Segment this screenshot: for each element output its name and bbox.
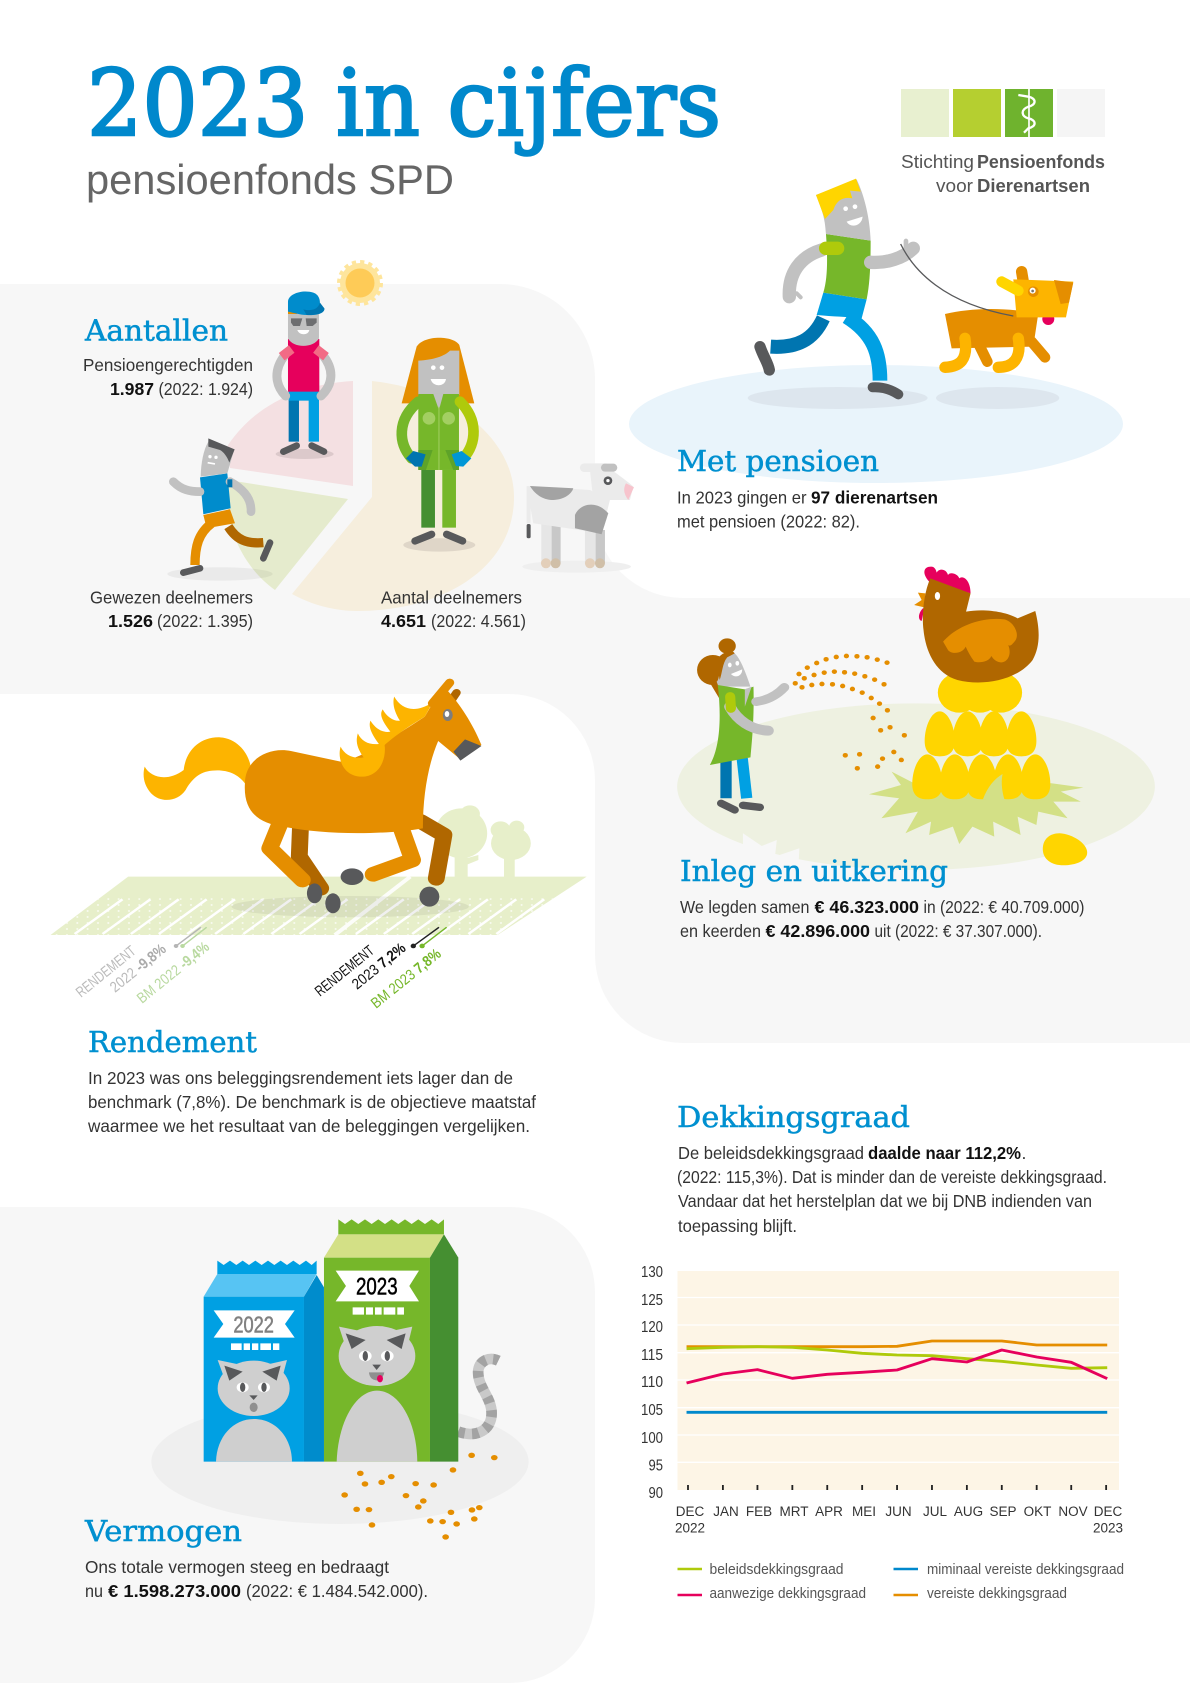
sub-icon: green box 2023: [324, 1219, 458, 1462]
icon: staff and snake: [1018, 89, 1035, 137]
panel: vermogen background: [0, 1207, 595, 1683]
x axis labels: [675, 1504, 1123, 1536]
text: dekkingsgraad: daalde naar 112,2%: [868, 1143, 1021, 1163]
sub-icon: loose egg: [1043, 833, 1087, 865]
icon: sun: [340, 263, 380, 303]
text: gewezen deelnemers: 1.526: [108, 611, 153, 631]
x axis labels: AUG: [954, 1504, 983, 1519]
y axis labels: 115: [641, 1347, 663, 1364]
text: inleg en uitkering: uit (2022: € 37.307.000).: [874, 921, 1042, 941]
logo: voor: [936, 175, 973, 196]
sub-icon: trees: [435, 805, 531, 877]
sub-icon: green box 2023: 2023: [356, 1273, 398, 1300]
labels: rendement 2022: RENDEMENT: [73, 943, 139, 1001]
legend: beleidsdekkingsgraad: [710, 1562, 844, 1578]
x axis labels: 2023: [1093, 1520, 1123, 1536]
sub-icon: blue box 2022: 2022: [233, 1311, 274, 1337]
subtitle: pensioenfonds SPD: [86, 156, 454, 203]
text: dekkingsgraad: .: [1022, 1143, 1026, 1163]
text: gewezen deelnemers: Gewezen deelnemers: [90, 588, 253, 608]
x axis labels: OKT: [1024, 1504, 1051, 1519]
text: met pensioen: [677, 488, 938, 532]
x axis labels: MEI: [852, 1504, 876, 1519]
logo: [901, 89, 1105, 196]
text: inleg en uitkering: in (2022: € 40.709.000): [924, 897, 1084, 917]
sub-icon: field: [51, 877, 587, 935]
y axis labels: 125: [641, 1292, 663, 1309]
text: pensioengerechtigden: (2022: 1.924): [158, 379, 253, 399]
labels: rendement 2022: BM 2022 -9,4%: [134, 939, 213, 1007]
text: met pensioen: In 2023 gingen er: [677, 488, 807, 508]
y axis labels: 105: [641, 1402, 663, 1419]
legend: aanwezige dekkingsgraad: [710, 1586, 866, 1602]
sub-icon: horse: [144, 683, 481, 913]
illustration: horse on field: [51, 683, 587, 948]
logo: Dierenartsen: [977, 175, 1090, 196]
y axis labels: 110: [641, 1374, 663, 1391]
sub-icon: 2022 return marks: [174, 927, 207, 948]
legend: miminaal vereiste dekkingsgraad: [927, 1562, 1124, 1578]
icon: running former participant: [167, 438, 273, 581]
text: gewezen deelnemers: [90, 588, 253, 631]
text: vermogen: Ons totale vermogen steeg en bedraagt: [85, 1557, 389, 1577]
text: gewezen deelnemers: (2022: 1.395): [157, 611, 253, 631]
heading: Inleg en uitkering: Inleg en uitkering: [680, 854, 948, 888]
logo: Stichting: [901, 151, 974, 172]
text: dekkingsgraad: De beleidsdekkingsgraad: [678, 1143, 864, 1163]
text: aantal deelnemers: (2022: 4.561): [431, 611, 526, 631]
sub-icon: cat tail: [458, 1359, 498, 1434]
text: dekkingsgraad: toepassing blijft.: [678, 1216, 797, 1236]
text: inleg en uitkering: [680, 897, 1084, 941]
x axis labels: APR: [815, 1504, 843, 1519]
pie chart: aantallen: [227, 381, 514, 611]
logo: Pensioenfonds: [977, 151, 1105, 172]
icon: calf: [522, 467, 634, 573]
y axis labels: 130: [641, 1264, 663, 1281]
icon: vet woman: [402, 338, 475, 552]
text: vermogen: € 1.598.273.000: [108, 1581, 241, 1601]
data lines and ticks: [687, 1341, 1107, 1490]
illustration: woman feeding hen on eggs: [677, 567, 1155, 883]
heading: Vermogen: Vermogen: [84, 1514, 242, 1548]
labels: rendement 2022: 2022 -9,8%: [107, 941, 170, 996]
text: pensioengerechtigden: Pensioengerechtigden: [83, 355, 253, 375]
icon: man walking dog: [748, 179, 1073, 409]
sub-icon: hen: [914, 567, 1039, 682]
text: aantal deelnemers: [381, 588, 526, 631]
sub-icon: nest: [869, 772, 1083, 844]
text: vermogen: nu: [85, 1581, 103, 1601]
y axis labels: 90: [648, 1485, 663, 1502]
sub-icon: dog: [945, 272, 1073, 367]
x axis labels: 2022: [675, 1520, 705, 1536]
text: aantal deelnemers: Aantal deelnemers: [381, 588, 522, 608]
legend: vereiste dekkingsgraad: [927, 1586, 1067, 1602]
y axis labels: 100: [641, 1430, 663, 1447]
sub-icon: blue box 2022: [204, 1261, 324, 1462]
x axis labels: DEC: [676, 1504, 704, 1519]
icon: pensioner man with cap: [276, 291, 334, 459]
heading: Dekkingsgraad: Dekkingsgraad: [677, 1100, 910, 1134]
sub-icon: 2023 return marks: [411, 927, 447, 948]
text: rendement: In 2023 was ons beleggingsrendement iets lager dan de: [88, 1068, 513, 1088]
text: pensioengerechtigden: 1.987: [110, 379, 154, 399]
text: pensioengerechtigden: [83, 355, 253, 399]
illustration: cat food boxes: [151, 1219, 529, 1540]
text: rendement: waarmee we het resultaat van de beleggingen vergelijken.: [87, 1116, 530, 1136]
legend: [678, 1562, 1124, 1602]
y axis labels: 95: [648, 1458, 663, 1474]
text: rendement: [87, 1068, 536, 1136]
text: inleg en uitkering: We legden samen: [680, 897, 810, 917]
x axis labels: JUL: [923, 1504, 947, 1519]
x axis labels: JUN: [885, 1504, 912, 1519]
sub-icon: eggs: [912, 673, 1050, 799]
y axis labels: 120: [641, 1319, 663, 1336]
labels: rendement 2023: 2023 7,2%: [349, 940, 409, 993]
text: aantal deelnemers: 4.651: [381, 611, 426, 631]
y axis labels: [641, 1264, 663, 1502]
x axis labels: DEC: [1094, 1504, 1122, 1519]
x axis labels: JAN: [713, 1504, 739, 1519]
text: dekkingsgraad: (2022: 115,3%). Dat is minder dan de vereiste dekkingsgraad.: [677, 1167, 1107, 1187]
x axis labels: FEB: [746, 1504, 772, 1519]
heading: Aantallen: Aantallen: [84, 314, 228, 348]
labels: rendement 2023: BM 2023 7,8%: [368, 945, 445, 1012]
sub-icon: scattered seed: [793, 654, 907, 771]
heading: Rendement: Rendement: [88, 1025, 257, 1059]
x axis labels: SEP: [989, 1504, 1017, 1519]
text: met pensioen: met pensioen (2022: 82).: [677, 512, 860, 532]
text: vermogen: (2022: € 1.484.542.000).: [246, 1581, 428, 1601]
ground: met pensioen: [629, 365, 1123, 483]
title: 2023 in cijfers: [87, 50, 721, 157]
heading: Met pensioen: Met pensioen: [677, 444, 879, 478]
text: rendement: benchmark (7,8%). De benchmark is de objectieve maatstaf: [88, 1092, 536, 1112]
text: inleg en uitkering: € 42.896.000: [766, 921, 870, 941]
text: met pensioen: 97 dierenartsen: [811, 488, 938, 508]
x axis labels: MRT: [780, 1504, 808, 1519]
text: inleg en uitkering: en keerden: [680, 921, 761, 941]
labels: rendement 2023: [312, 940, 445, 1012]
text: dekkingsgraad: Vandaar dat het herstelplan dat we bij DNB indienden van: [678, 1191, 1092, 1211]
text: vermogen: [85, 1557, 428, 1601]
sub-icon: pellets: [341, 1453, 498, 1540]
text: inleg en uitkering: € 46.323.000: [814, 897, 919, 917]
text: dekkingsgraad: [677, 1143, 1107, 1236]
labels: rendement 2023: RENDEMENT: [312, 942, 378, 1000]
labels: rendement 2022: [73, 939, 213, 1007]
line chart: dekkingsgraad: [641, 1264, 1123, 1536]
sub-icon: woman: [697, 638, 784, 810]
x axis labels: NOV: [1058, 1504, 1088, 1519]
panel: aantallen and inleg background: [0, 284, 1190, 1043]
